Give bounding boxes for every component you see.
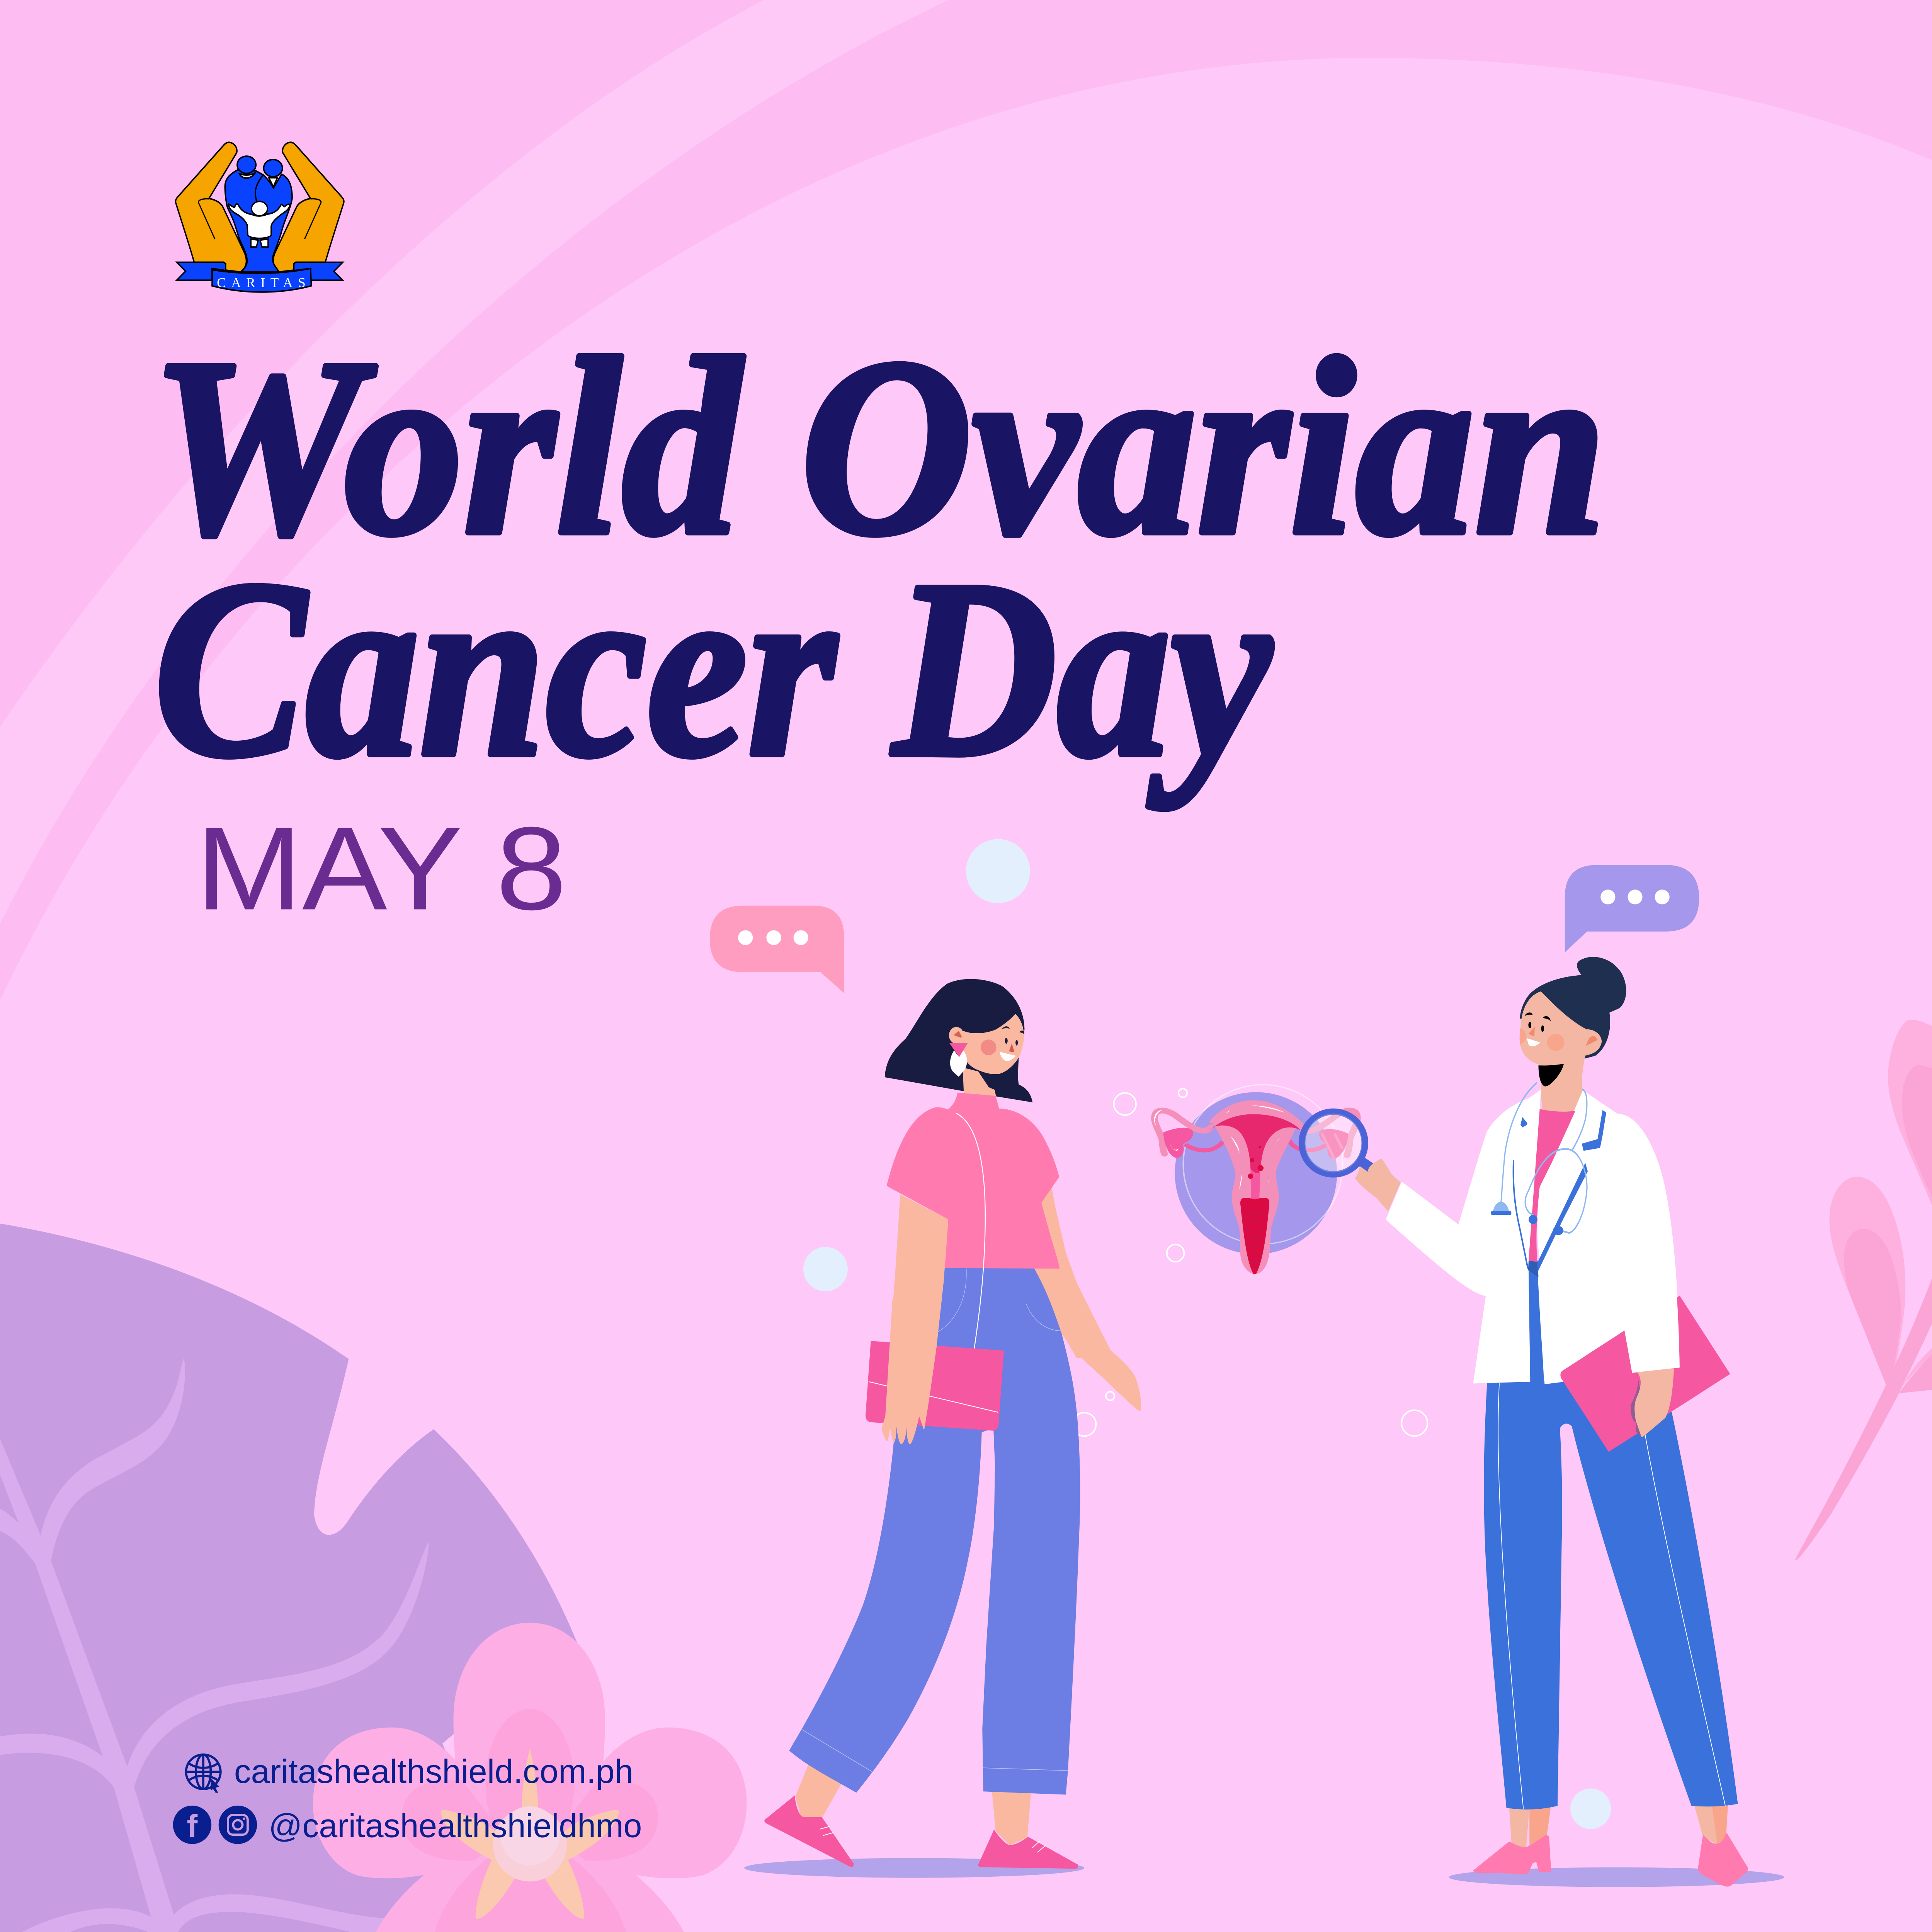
icon: facebook: f <box>187 1808 198 1844</box>
decorative flower <box>313 1623 747 1932</box>
doctor sleeve <box>1624 1272 1680 1373</box>
patient lower arm <box>1050 1304 1141 1412</box>
backdrop circle <box>1175 1092 1337 1254</box>
decorative bubbles <box>803 839 1611 1829</box>
doctor legs <box>1473 1380 1748 1886</box>
logo: left hand <box>175 142 247 272</box>
logo: Caritas <box>175 142 344 292</box>
doctor coat <box>1386 1090 1541 1384</box>
magnifier <box>1301 1111 1379 1178</box>
uterine cavity <box>1209 1114 1301 1173</box>
patient shirt <box>886 1093 1060 1352</box>
hand holding magnifier <box>1355 1159 1401 1211</box>
doctor upper body <box>1386 957 1730 1452</box>
doctor hand <box>1631 1372 1643 1437</box>
ovaries <box>1163 1128 1348 1159</box>
title line 2: Cancer Day <box>154 529 1274 810</box>
coat trim <box>1520 1110 1606 1272</box>
cervix <box>1250 1169 1260 1199</box>
date: MAY 8 <box>196 802 567 934</box>
patient clutch <box>866 1341 1004 1430</box>
doctor scrubs <box>1528 1260 1544 1384</box>
patient face <box>949 1014 1024 1077</box>
logo: family <box>225 156 292 272</box>
icon: globe <box>186 1755 221 1793</box>
doctor neck <box>1541 1056 1585 1112</box>
decorative plant: right edge <box>1795 1020 1932 1560</box>
social handle: @caritashealthshieldhmo <box>269 1807 642 1844</box>
icon: instagram <box>219 1806 257 1844</box>
title line 1: World Ovarian <box>150 307 1607 588</box>
speech bubble: pink <box>710 906 844 993</box>
speech bubble: purple <box>1565 865 1699 952</box>
figure: patient <box>764 979 1141 1869</box>
vaginal canal <box>1240 1198 1269 1274</box>
title <box>150 307 1607 810</box>
figure: doctor <box>1386 957 1748 1886</box>
doctor clipboard <box>1560 1296 1730 1452</box>
illustration: uterus with magnifier <box>1154 1085 1401 1274</box>
logo: right hand <box>273 142 344 272</box>
icon: facebook <box>173 1806 211 1844</box>
patient legs <box>764 1268 1080 1869</box>
patient front arm <box>882 1194 948 1444</box>
social contact <box>173 1806 642 1844</box>
doctor hair <box>1520 957 1626 1060</box>
website url: caritashealthshield.com.ph <box>234 1753 633 1790</box>
background arcs <box>0 0 1932 1000</box>
website contact <box>186 1753 633 1793</box>
doctor shirt <box>1529 1109 1575 1262</box>
highlights <box>1226 1105 1284 1190</box>
tumours <box>1248 1146 1264 1179</box>
uterus body <box>1209 1100 1304 1274</box>
logo: ribbon <box>177 262 343 292</box>
doctor head <box>1519 992 1602 1066</box>
patient hair <box>885 979 1115 1358</box>
shadow: doctor <box>1449 1867 1784 1887</box>
decorative leaf: bottom left <box>0 1223 592 1932</box>
stethoscope <box>1501 1083 1587 1233</box>
logo text: CARITAS: CARITAS <box>217 275 306 290</box>
fallopian tubes <box>1155 1111 1357 1155</box>
shadow: patient <box>744 1858 1084 1878</box>
